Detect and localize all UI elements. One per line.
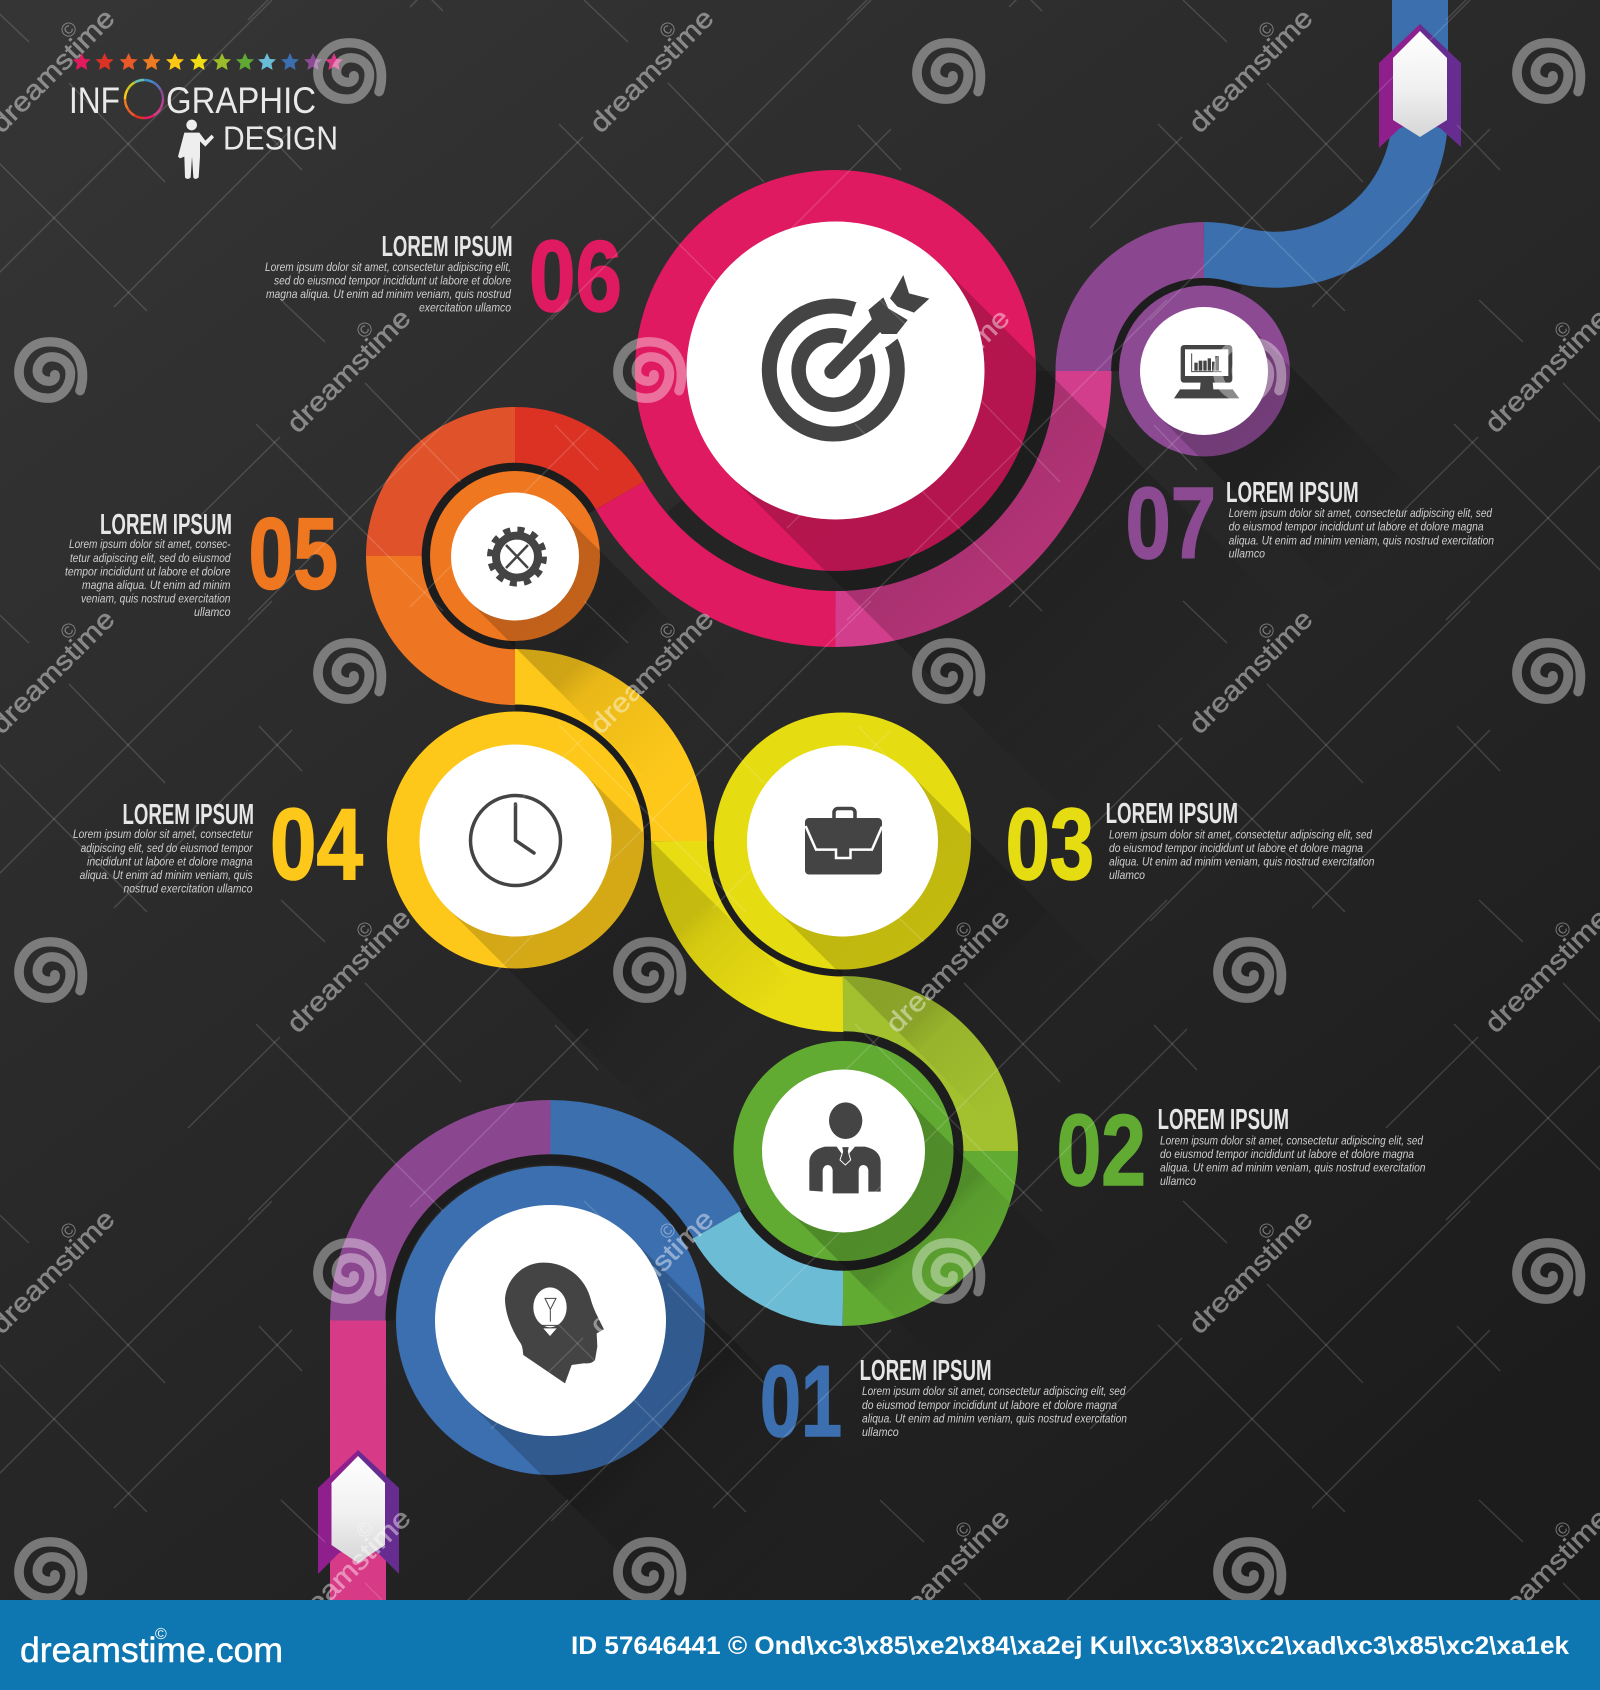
step 03 text: LOREM IPSUM <box>1106 798 1238 830</box>
watermark: rotated dreamstime text: © <box>56 1218 82 1244</box>
ribbon segment: magenta straight start <box>330 1320 386 1600</box>
step 02 text: 02 <box>1057 1095 1146 1207</box>
watermark: rotated dreamstime text: © <box>951 917 977 943</box>
watermark: rotated dreamstime text: dreamstime <box>1479 1503 1600 1639</box>
step 06 text <box>265 221 622 333</box>
step 07 text: LOREM IPSUM <box>1226 477 1359 509</box>
step 02 text: LOREM IPSUM <box>1158 1104 1289 1136</box>
step 07 text <box>1126 468 1494 580</box>
bookmark tag: top right <box>1379 24 1461 148</box>
watermark: rotated dreamstime text: © <box>951 317 977 343</box>
step 04 text <box>73 789 363 901</box>
node 05: white disc and gear icon <box>451 492 579 620</box>
step 07 text: do eiusmod tempor incididunt ut labore et dolore magna <box>1229 520 1484 534</box>
ring 06 <box>635 170 1036 571</box>
watermark: rotated dreamstime text: dreamstime <box>584 3 720 139</box>
icon: presenter figure <box>178 120 214 179</box>
step 06 text: sed do eiusmod tempor incididunt ut labore et dolore <box>274 274 511 288</box>
step 03 text: do eiusmod tempor incididunt ut labore et dolore magna <box>1109 841 1363 855</box>
icon: computer with bar chart <box>1174 345 1239 398</box>
node 03: white disc and briefcase icon <box>747 746 938 936</box>
watermark: rotated dreamstime text: © <box>1550 317 1576 343</box>
ribbon segment: pink <box>836 371 1084 619</box>
step 04 text: nostrud exercitation ullamco <box>124 882 253 896</box>
node 04: white disc and clock icon <box>420 744 612 936</box>
watermark: rotated dreamstime text: © <box>951 1517 977 1543</box>
step 06 text: 06 <box>529 221 622 333</box>
ribbon segment: green <box>843 1151 990 1298</box>
ribbon segment: red <box>515 435 620 496</box>
watermark: rotated dreamstime text: © <box>352 317 378 343</box>
logo word: INF: INF <box>69 80 120 121</box>
watermark: rotated dreamstime text: dreamstime <box>281 903 417 1039</box>
ribbon segment: orange red <box>394 435 515 556</box>
step 02 text <box>1057 1095 1426 1207</box>
icon: head with light bulb <box>505 1263 604 1383</box>
icon: gear <box>490 530 544 583</box>
watermark: rotated dreamstime text: dreamstime <box>880 303 1016 439</box>
watermark: rotated dreamstime text: dreamstime <box>880 1503 1016 1639</box>
ribbon segment: purple upper <box>1084 250 1204 371</box>
step 04 text: aliqua. Ut enim ad minim veniam, quis <box>80 868 253 882</box>
icon: clock <box>470 796 560 886</box>
step 05 text: Lorem ipsum dolor sit amet, consec- <box>69 537 231 551</box>
watermark: rotated dreamstime text: dreamstime <box>880 903 1016 1039</box>
step 06 text: Lorem ipsum dolor sit amet, consectetur adipiscing elit, <box>265 260 511 274</box>
watermark: rotated dreamstime text: © <box>655 618 681 644</box>
step 05 text: magna aliqua. Ut enim ad minim <box>82 578 231 592</box>
watermark: rotated dreamstime text: dreamstime <box>584 1204 720 1340</box>
footer: dreamstime logo: dreamstime.com <box>20 1631 283 1670</box>
watermark: rotated dreamstime text: © <box>1550 917 1576 943</box>
ring 04 <box>387 712 644 968</box>
watermark: rotated dreamstime text: © <box>56 17 82 43</box>
ring 03 <box>714 712 971 970</box>
icon: briefcase <box>805 808 882 874</box>
step 01 text: do eiusmod tempor incididunt ut labore et dolore magna <box>862 1398 1117 1412</box>
step 02 text: ullamco <box>1160 1174 1196 1188</box>
watermark: rotated dreamstime text: dreamstime <box>1183 604 1319 740</box>
logo: infographic design <box>69 53 343 179</box>
step 05 text: tempor incididunt ut labore et dolore <box>65 564 231 578</box>
step 04 text: Lorem ipsum dolor sit amet, consectetur <box>73 827 253 841</box>
node 02: white disc and businessman icon <box>762 1070 925 1232</box>
watermark: rotated dreamstime text: © <box>655 1218 681 1244</box>
ribbon segment: yellow <box>679 841 843 1004</box>
winding rainbow ribbon path <box>358 0 1420 1600</box>
step 03 text: 03 <box>1006 789 1094 901</box>
footer bar <box>0 1600 1600 1690</box>
watermark: rotated dreamstime text: © <box>1254 1218 1280 1244</box>
watermark: rotated dreamstime text: © <box>56 618 82 644</box>
step 03 text <box>1006 789 1375 901</box>
ribbon segment: crimson <box>620 496 836 619</box>
step 07 text: 07 <box>1126 468 1216 580</box>
step 05 text: ullamco <box>194 605 231 619</box>
step 02 text: Lorem ipsum dolor sit amet, consectetur adipiscing elit, sed <box>1160 1134 1423 1148</box>
ribbon segment: blue <box>550 1128 717 1224</box>
watermark: rotated dreamstime text: © <box>655 17 681 43</box>
step 01 text: aliqua. Ut enim ad minim veniam, quis nostrud exercitation <box>862 1411 1127 1425</box>
rainbow letter O <box>125 80 163 118</box>
watermark: rotated dreamstime text: © <box>1550 1517 1576 1543</box>
step 04 text: LOREM IPSUM <box>122 799 254 831</box>
ring 07 <box>1119 286 1290 456</box>
coloured rings <box>387 170 1290 1475</box>
step 05 text: 05 <box>248 498 338 610</box>
logo word: DESIGN: DESIGN <box>223 120 338 156</box>
ring 02 <box>734 1041 954 1261</box>
watermark: rotated dreamstime text: © <box>1254 17 1280 43</box>
step 01 text: LOREM IPSUM <box>860 1355 992 1387</box>
node 01: white disc and head icon <box>435 1205 666 1436</box>
ribbon segment: orange <box>394 556 515 677</box>
step 01 text <box>760 1346 1127 1458</box>
step 06 text: exercitation ullamco <box>419 300 511 314</box>
watermark: rotated dreamstime text: © <box>352 917 378 943</box>
step 03 text: aliqua. Ut enim ad minim veniam, quis nostrud exercitation <box>1109 855 1375 869</box>
watermark: rotated dreamstime text: dreamstime <box>281 1503 417 1639</box>
watermark: rotated dreamstime text: dreamstime <box>1183 1204 1319 1340</box>
ribbon segment: amber <box>515 677 679 841</box>
step 01 text: Lorem ipsum dolor sit amet, consectetur adipiscing elit, sed <box>862 1384 1126 1398</box>
watermark: rotated dreamstime text: © <box>352 1517 378 1543</box>
node 07: white disc and computer icon <box>1140 307 1268 435</box>
ring 01 <box>396 1166 705 1475</box>
step 02 text: aliqua. Ut enim ad minim veniam, quis nostrud exercitation <box>1160 1160 1426 1174</box>
icon: businessman <box>809 1102 881 1193</box>
row of rainbow stars <box>73 53 343 70</box>
watermark: rotated dreamstime text: dreamstime <box>584 604 720 740</box>
step 07 text: Lorem ipsum dolor sit amet, consectetur adipiscing elit, sed <box>1229 506 1492 520</box>
step 03 text: ullamco <box>1109 868 1145 882</box>
ribbon segment: purple <box>358 1128 550 1320</box>
step 04 text: adipiscing elit, sed do eiusmod tempor <box>81 841 253 855</box>
step 04 text: 04 <box>270 789 363 901</box>
step 07 text: aliqua. Ut enim ad minim veniam, quis nostrud exercitation <box>1229 533 1494 547</box>
footer: image id and credit: ID 57646441 © Ond\xc3\x85\xe2\x84\xa2ej Kul\xc3\x83\xc2\xad\xc3\x85\xc2\xa1ek <box>571 1632 1569 1660</box>
step 05 text <box>65 498 338 619</box>
step 05 text: veniam, quis nostrud exercitation <box>81 592 231 606</box>
watermark: rotated dreamstime text: dreamstime <box>1479 903 1600 1039</box>
step 05 text: tetur adipiscing elit, sed do eiusmod <box>70 551 231 565</box>
watermark: rotated dreamstime text: dreamstime <box>281 303 417 439</box>
footer: dreamstime logo: © <box>155 1626 167 1643</box>
ribbon segment: light blue <box>717 1224 843 1298</box>
bookmark tag: bottom left <box>318 1450 399 1574</box>
step 03 text: Lorem ipsum dolor sit amet, consectetur adipiscing elit, sed <box>1109 828 1372 842</box>
step 01 text: ullamco <box>862 1425 899 1439</box>
node 06: white disc and target icon <box>686 222 984 520</box>
watermark: rotated dreamstime text: dreamstime <box>1479 303 1600 439</box>
step 06 text: LOREM IPSUM <box>382 231 513 263</box>
ribbon segment: lime <box>843 1004 990 1151</box>
ring 05 <box>430 471 600 641</box>
watermark: rotated dreamstime text: © <box>1254 618 1280 644</box>
logo word: GRAPHIC: GRAPHIC <box>166 80 316 121</box>
step 07 text: ullamco <box>1229 547 1265 561</box>
icon: target with arrow <box>769 275 929 434</box>
step 02 text: do eiusmod tempor incididunt ut labore et dolore magna <box>1160 1147 1414 1161</box>
step 05 text: LOREM IPSUM <box>100 509 232 541</box>
step 01 text: 01 <box>760 1346 842 1458</box>
watermark: rotated dreamstime text: dreamstime <box>1183 3 1319 139</box>
step 06 text: magna aliqua. Ut enim ad minim veniam, quis nostrud <box>266 287 511 301</box>
ribbon segment: blue exit <box>1204 0 1420 260</box>
step 04 text: incididunt ut labore et dolore magna <box>87 855 253 869</box>
long diagonal shadows <box>448 265 1433 1671</box>
dark gaps between ribbon and rings <box>390 282 1240 1320</box>
